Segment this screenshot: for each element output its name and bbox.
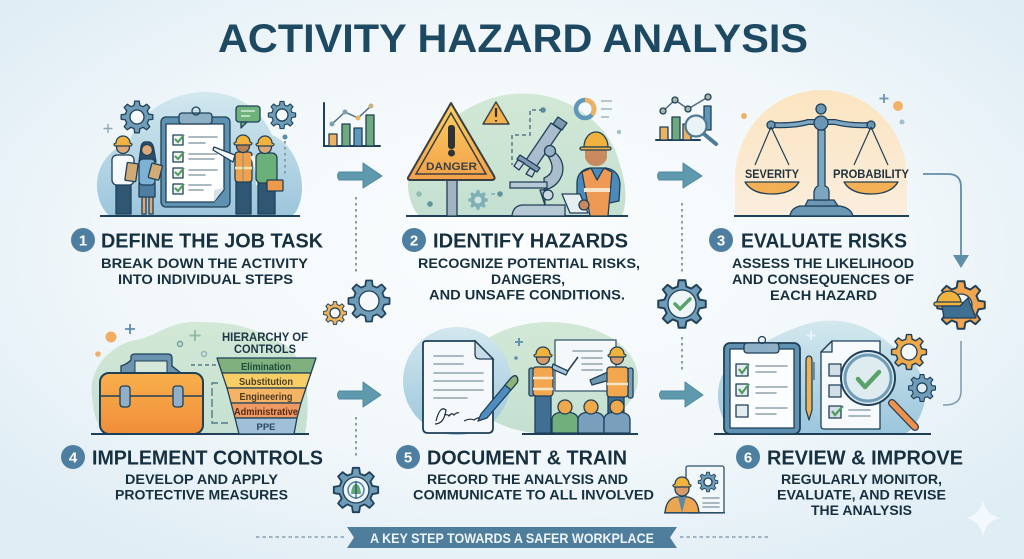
seated audience <box>552 400 630 433</box>
description: REGULARLY MONITOR, <box>781 472 942 487</box>
donut chart <box>576 100 612 118</box>
heading: DEFINE THE JOB TASK <box>101 230 324 252</box>
toolbox <box>100 354 203 434</box>
footer dashes right <box>680 536 768 538</box>
connector: dotted column 1 lower <box>355 417 357 458</box>
trainer left <box>529 347 578 433</box>
hierarchy heading: HIERARCHY OF <box>222 332 308 344</box>
arrow: step 2 to step 3 <box>658 163 702 188</box>
label: probability: PROBABILITY <box>833 169 909 181</box>
description: COMMUNICATE TO ALL INVOLVED <box>413 488 654 502</box>
heading: IDENTIFY HAZARDS <box>433 230 628 252</box>
footer ribbon <box>347 527 677 548</box>
footer dashes left <box>256 536 344 538</box>
title: ACTIVITY HAZARD ANALYSIS <box>218 17 808 61</box>
panel: step 2 identify hazards <box>402 93 640 302</box>
description <box>732 256 914 303</box>
arrow: step 5 to step 6 <box>660 382 703 407</box>
description: BREAK DOWN THE ACTIVITY <box>101 256 308 271</box>
connector: dotted column 1 <box>355 197 357 272</box>
icon: gear with bell <box>334 468 378 512</box>
trainer right <box>590 347 633 433</box>
arrow: step 1 to step 2 <box>338 163 382 188</box>
connector: dotted column 2 <box>681 203 683 272</box>
description: INTO INDIVIDUAL STEPS <box>118 272 293 287</box>
presentation board <box>555 340 616 391</box>
panel: step 5 document and train <box>396 322 654 502</box>
icon: chart with magnifier <box>656 94 716 144</box>
description: EVALUATE, AND REVISE <box>777 488 946 502</box>
illustration: toolbox and hierarchy pyramid <box>91 322 316 435</box>
description: DANGERS, <box>491 272 565 287</box>
step number 2 <box>402 228 426 252</box>
step number 6: 6 <box>744 450 752 466</box>
decorative sparkle <box>966 500 1000 536</box>
hierarchy pyramid: Engineering <box>240 392 292 403</box>
orange gear <box>892 335 926 369</box>
icon: blue gear <box>348 280 390 322</box>
danger sign: DANGER <box>426 161 477 173</box>
hierarchy pyramid <box>217 358 316 434</box>
arrow: step 4 to step 5 <box>338 382 381 407</box>
inspector <box>562 132 620 216</box>
description: PROTECTIVE MEASURES <box>115 488 288 502</box>
icon: bar and line chart <box>324 103 380 146</box>
step number 3 <box>709 228 733 252</box>
magnifying glass <box>841 351 915 427</box>
hierarchy pyramid: Substitution <box>239 377 293 388</box>
blue gear <box>909 375 935 401</box>
clipboard checklist <box>724 336 800 434</box>
step number 2: 2 <box>410 232 418 250</box>
description: THE ANALYSIS <box>811 503 912 518</box>
description <box>777 472 946 518</box>
label: severity: SEVERITY <box>745 169 799 181</box>
small warning triangle <box>483 102 509 124</box>
danger sign <box>408 103 495 216</box>
step number 6 <box>736 445 760 469</box>
microscope <box>510 117 567 216</box>
description: AND UNSAFE CONDITIONS. <box>429 288 625 302</box>
description <box>101 256 308 287</box>
description: RECORD THE ANALYSIS AND <box>427 472 628 487</box>
description <box>413 472 654 502</box>
icon: gear with hard hat <box>934 281 985 329</box>
hierarchy pyramid: Administrative <box>234 407 298 418</box>
illustration: checklist and magnifier <box>714 320 935 435</box>
heading: REVIEW & IMPROVE <box>767 448 963 470</box>
description: DEVELOP AND APPLY <box>125 472 278 487</box>
heading: EVALUATE RISKS <box>741 230 907 252</box>
description: AND CONSEQUENCES OF <box>732 272 914 287</box>
step number 5 <box>396 445 420 469</box>
document under review <box>821 341 880 429</box>
hierarchy pyramid: Elimination <box>241 362 291 373</box>
panel: step 4 implement controls <box>61 322 323 502</box>
step number 1: 1 <box>79 232 87 250</box>
icon: gear with check <box>658 280 706 328</box>
illustration: scales on peach circle <box>734 90 909 217</box>
illustration: danger sign, microscope, inspector <box>406 93 628 217</box>
step number 5: 5 <box>404 450 412 466</box>
description <box>418 256 640 302</box>
footer ribbon: A KEY STEP TOWARDS A SAFER WORKPLACE <box>370 530 654 546</box>
worker with clipboard <box>112 136 138 214</box>
step number 1 <box>71 228 95 252</box>
description: EACH HAZARD <box>770 288 877 303</box>
signed document <box>423 341 518 433</box>
heading: DOCUMENT & TRAIN <box>427 448 627 470</box>
worker with vest pointing <box>213 135 258 214</box>
illustration: team at clipboard <box>97 92 302 217</box>
panel: step 3 evaluate risks <box>709 90 914 303</box>
step number 3: 3 <box>717 232 725 250</box>
pencil <box>806 356 814 420</box>
panel: step 1 define the job task <box>71 92 324 287</box>
heading: IMPLEMENT CONTROLS <box>92 448 323 470</box>
connector: dotted column 2 lower <box>681 337 683 372</box>
description: ASSESS THE LIKELIHOOD <box>732 256 914 271</box>
worker in green with folder <box>256 136 283 214</box>
description <box>115 472 288 502</box>
illustration: signed document and training <box>403 322 638 435</box>
connector: return line beside step 6 <box>943 341 961 405</box>
icon: small orange gear <box>324 302 346 324</box>
arrow: step 3 down to step 6 <box>923 174 969 268</box>
step number 4 <box>61 445 85 469</box>
description: RECOGNIZE POTENTIAL RISKS, <box>418 256 640 271</box>
scale frame <box>745 104 898 216</box>
step number 4: 4 <box>69 450 78 466</box>
hierarchy heading: CONTROLS <box>234 344 296 356</box>
hierarchy heading <box>222 332 308 356</box>
icon: worker with document <box>664 466 725 514</box>
hierarchy pyramid: PPE <box>256 422 276 433</box>
panel: step 6 review and improve <box>714 320 963 518</box>
woman with tablet <box>139 142 163 214</box>
